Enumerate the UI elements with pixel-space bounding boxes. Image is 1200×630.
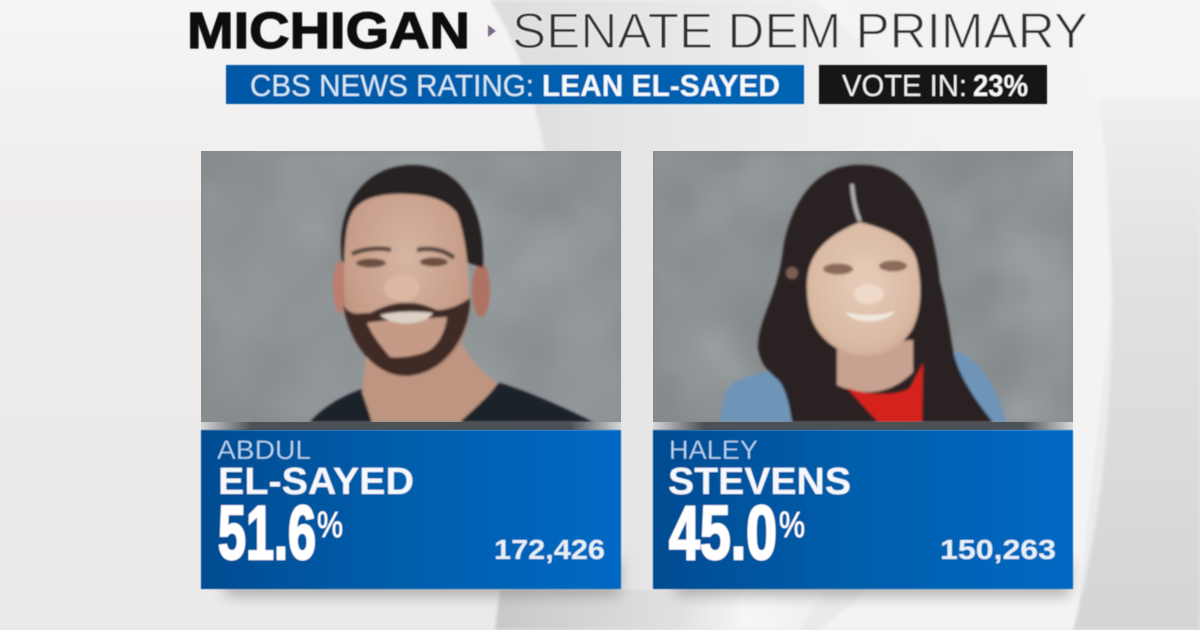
panel: El-Sayed xyxy=(201,151,621,589)
nose xyxy=(854,284,884,304)
title: MICHIGAN xyxy=(187,2,470,59)
hair xyxy=(758,165,993,422)
nose xyxy=(384,275,420,301)
last name: STEVENS xyxy=(668,461,851,503)
shirt xyxy=(310,383,593,422)
panel: Stevens xyxy=(653,151,1073,589)
votes: 172,426 xyxy=(494,534,605,565)
result box xyxy=(653,430,1073,589)
result box: % xyxy=(779,504,805,545)
neck xyxy=(362,345,498,422)
eyebrows xyxy=(352,249,391,254)
jacket xyxy=(720,352,1006,422)
beard xyxy=(343,298,470,376)
vote in box: VOTE IN: xyxy=(842,68,967,103)
first name: ABDUL xyxy=(217,435,311,465)
ear xyxy=(786,267,798,279)
card shadows xyxy=(225,560,1070,596)
photo: Abdul El-Sayed xyxy=(201,151,621,422)
face xyxy=(344,194,470,375)
percentage: 45.0 xyxy=(669,491,777,576)
vote in box xyxy=(819,65,1047,104)
percentage: 51.6 xyxy=(218,491,316,576)
title: SENATE DEM PRIMARY xyxy=(512,3,1088,59)
rating bar: CBS NEWS RATING: xyxy=(250,68,534,103)
face xyxy=(807,222,920,356)
shirt xyxy=(847,363,923,422)
photo edge xyxy=(201,422,621,430)
votes: 150,263 xyxy=(940,534,1056,565)
photo: Haley Stevens xyxy=(653,151,1073,422)
hair xyxy=(341,165,483,268)
title xyxy=(187,2,1088,59)
eyes xyxy=(823,264,853,274)
last name: EL-SAYED xyxy=(218,461,414,503)
rating bar: LEAN EL-SAYED xyxy=(542,68,780,103)
rating bar xyxy=(226,65,804,104)
mouth xyxy=(380,312,433,323)
result box xyxy=(201,430,621,589)
result box: % xyxy=(317,504,343,545)
ears xyxy=(333,261,347,313)
vote in box: 23% xyxy=(973,68,1028,103)
photo edge xyxy=(653,422,1073,430)
smile xyxy=(845,311,895,321)
parting xyxy=(852,184,860,221)
eyes xyxy=(356,258,386,268)
neck xyxy=(837,340,913,392)
first name: HALEY xyxy=(669,435,758,465)
